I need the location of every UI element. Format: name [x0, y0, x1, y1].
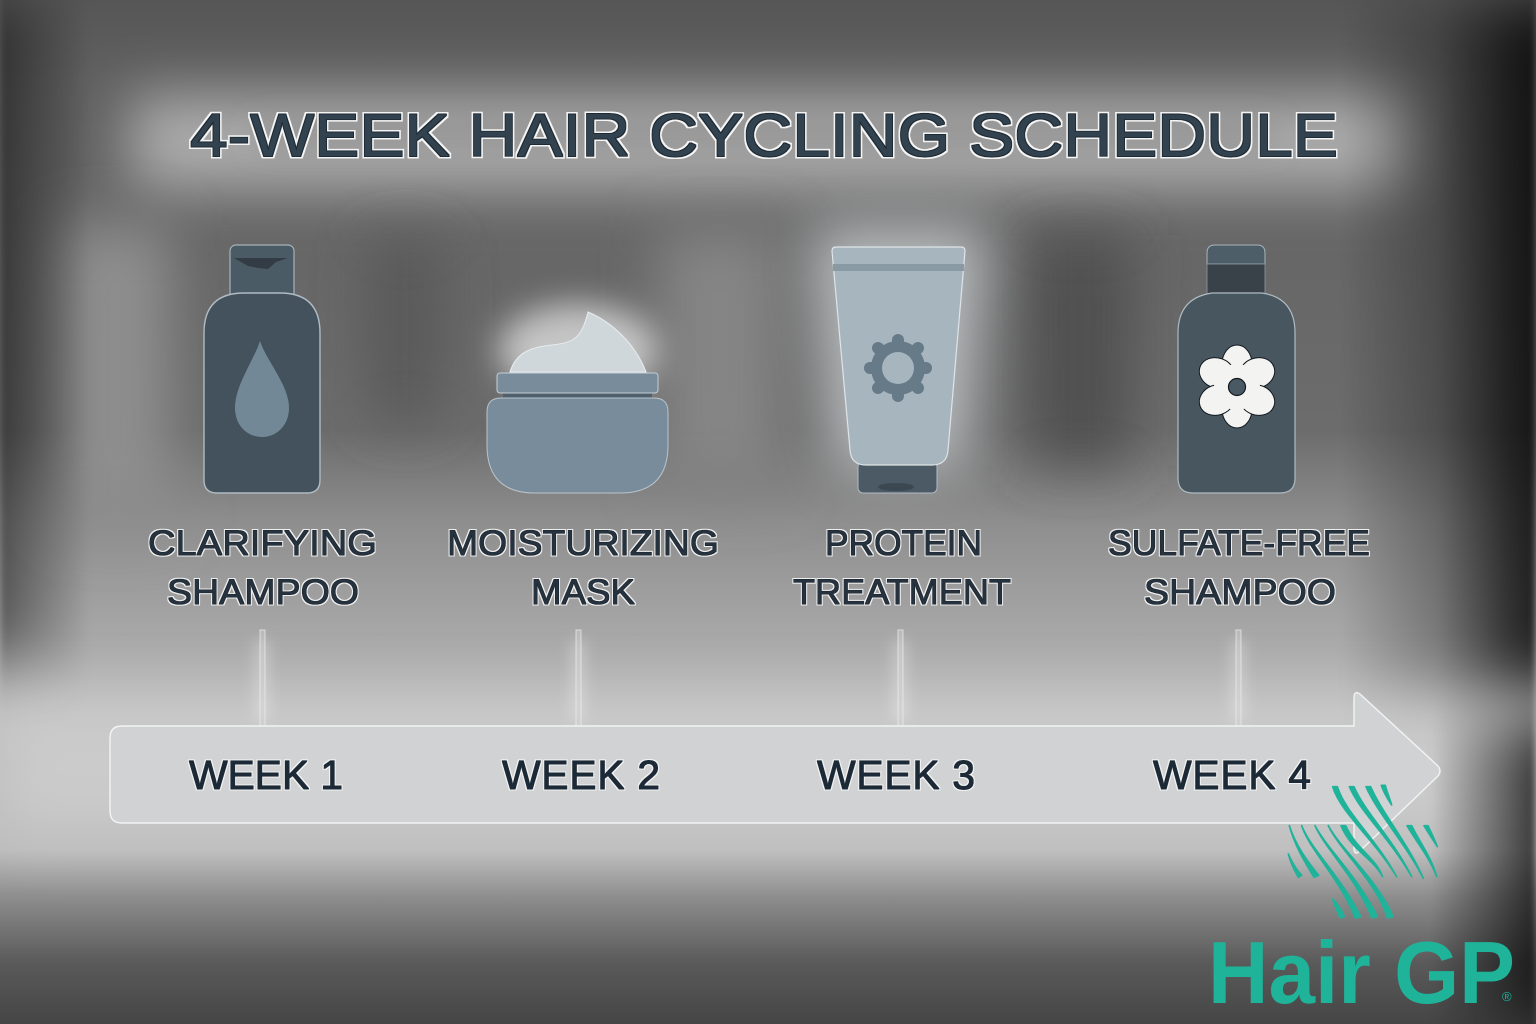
label: clarifying shampoo	[148, 524, 377, 612]
week labels: WEEK 3	[817, 752, 975, 798]
label: moisturizing mask: MOISTURIZING	[447, 524, 719, 563]
label: moisturizing mask: MASK	[531, 573, 635, 612]
logo: Hair GP: Hair GP	[1208, 923, 1515, 1022]
label: protein treatment: TREATMENT	[793, 573, 1011, 612]
icon: gear	[870, 340, 926, 396]
label: sulfate-free shampoo: SULFATE-FREE	[1108, 524, 1370, 563]
logo: Hair GP	[1208, 785, 1515, 1022]
connector lines	[255, 630, 1245, 726]
week labels: WEEK 2	[502, 752, 660, 798]
week labels: WEEK 4	[1153, 752, 1311, 798]
label: protein treatment: PROTEIN	[825, 524, 982, 563]
icon: protein treatment tube	[810, 225, 990, 493]
logo strands	[1288, 785, 1437, 918]
icon: flower	[1195, 345, 1279, 428]
label: sulfate-free shampoo: SHAMPOO	[1144, 573, 1336, 612]
icon: water drop	[235, 341, 289, 437]
logo: Hair GP: ®	[1502, 989, 1512, 1004]
icon: moisturizing mask jar	[487, 304, 668, 493]
label: moisturizing mask	[447, 524, 719, 612]
title: 4-WEEK HAIR CYCLING SCHEDULE	[190, 102, 1338, 169]
week labels: WEEK 1	[189, 752, 343, 798]
timeline arrow	[110, 693, 1440, 853]
icon: sulfate-free shampoo bottle	[1178, 245, 1295, 493]
label: protein treatment	[793, 524, 1011, 612]
week labels	[189, 752, 1311, 798]
label: sulfate-free shampoo	[1108, 524, 1370, 612]
label: clarifying shampoo: CLARIFYING	[148, 524, 377, 563]
icon: clarifying shampoo bottle	[204, 245, 320, 493]
label: clarifying shampoo: SHAMPOO	[167, 573, 359, 612]
